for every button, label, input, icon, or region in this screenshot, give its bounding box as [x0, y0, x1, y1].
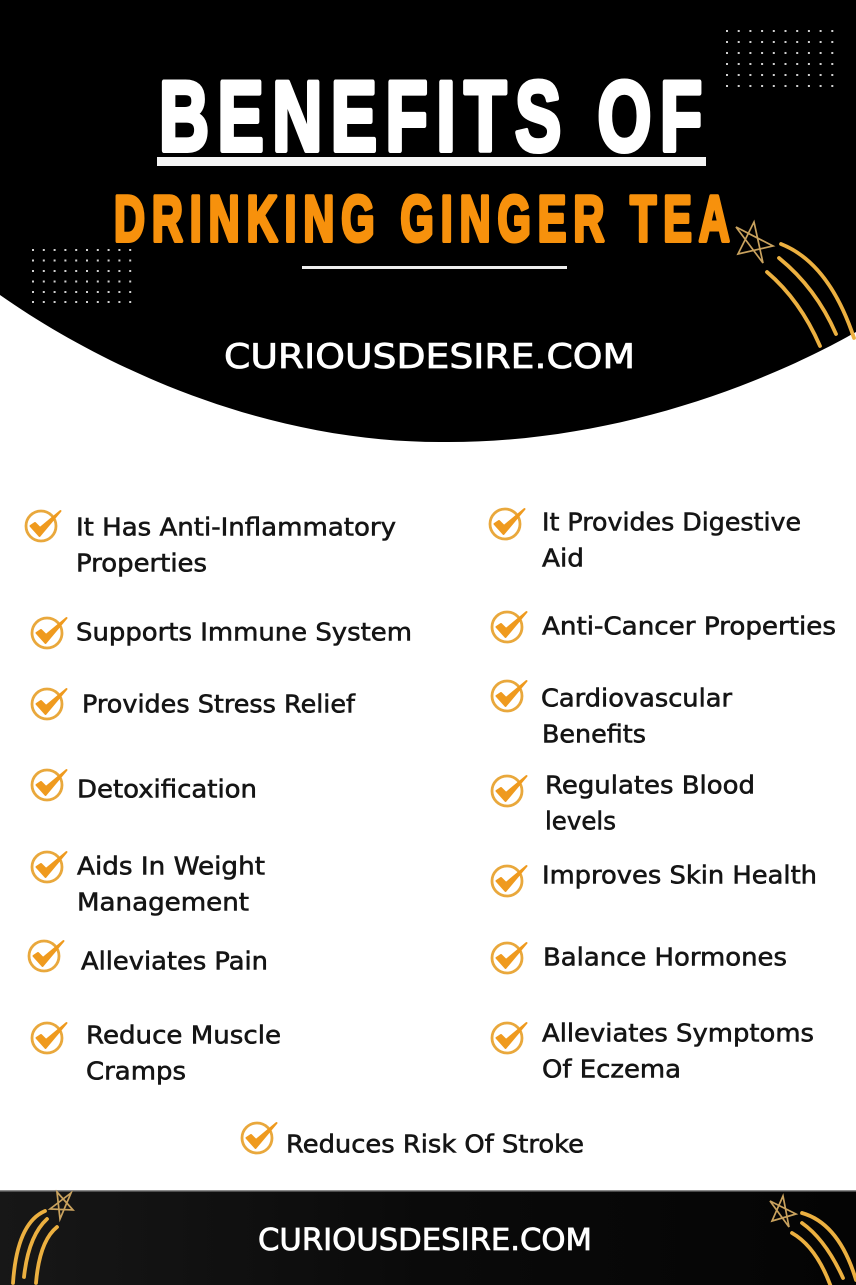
benefit: muscle cramps: Cramps: [86, 1056, 186, 1086]
divider line: [302, 266, 567, 269]
benefit: weight management: [32, 852, 265, 916]
benefit: digestive aid: Aid: [542, 544, 584, 572]
footer website: CURIOUSDESIRE.COM: [258, 1223, 592, 1258]
benefit: anti-cancer: Anti-Cancer Properties: [542, 612, 836, 640]
benefit: eczema: [492, 1018, 814, 1084]
benefit: anti-inflammatory: [26, 511, 396, 578]
benefit: weight management: Management: [77, 888, 249, 916]
dots left: [32, 250, 133, 302]
footer band: [0, 1190, 856, 1285]
benefit: cardiovascular: Benefits: [542, 720, 646, 748]
icon: star and streaks bottom right: [770, 1196, 856, 1285]
benefit: blood levels: levels: [545, 806, 616, 836]
icon: star and streaks bottom left: [13, 1192, 73, 1283]
benefit: muscle cramps: Reduce Muscle: [86, 1020, 281, 1050]
benefit: anti-inflammatory: It Has Anti-Inflammatory: [76, 512, 396, 542]
dots top right: [726, 31, 834, 86]
benefit: detoxification: Detoxification: [77, 774, 257, 804]
benefit: digestive aid: [490, 508, 801, 572]
benefit: detoxification: [32, 770, 257, 804]
benefit: digestive aid: It Provides Digestive: [542, 508, 801, 536]
icon: star and streaks top right: [736, 222, 854, 346]
benefit: hormones: Balance Hormones: [543, 942, 787, 972]
benefit: stroke risk: Reduces Risk Of Stroke: [286, 1130, 584, 1158]
benefit: stress relief: Provides Stress Relief: [82, 690, 356, 718]
benefit: eczema: Of Eczema: [542, 1054, 681, 1084]
benefit: weight management: Aids In Weight: [77, 852, 265, 880]
benefit: skin health: Improves Skin Health: [542, 860, 817, 890]
benefit: immune system: Supports Immune System: [76, 618, 412, 646]
benefit: blood levels: Regulates Blood: [545, 770, 755, 800]
benefit: blood levels: [492, 770, 755, 836]
benefit: muscle cramps: [32, 1020, 281, 1086]
title underline: [157, 157, 706, 166]
benefit: skin health: [492, 860, 817, 896]
subtitle: drinking ginger tea: DRINKING GINGER TEA: [114, 182, 730, 255]
header website: CURIOUSDESIRE.COM: [224, 337, 635, 377]
header black curved panel: [0, 0, 856, 442]
title: benefits of: BENEFITS OF: [159, 62, 702, 173]
benefit: alleviates pain: Alleviates Pain: [81, 946, 268, 976]
benefit: stroke risk: [242, 1123, 584, 1158]
benefit: alleviates pain: [29, 941, 268, 976]
benefit: cardiovascular: Cardiovascular: [541, 684, 733, 712]
benefit: anti-inflammatory: Properties: [76, 548, 207, 578]
benefit: eczema: Alleviates Symptoms: [542, 1018, 814, 1048]
benefit: cardiovascular: [492, 681, 733, 748]
